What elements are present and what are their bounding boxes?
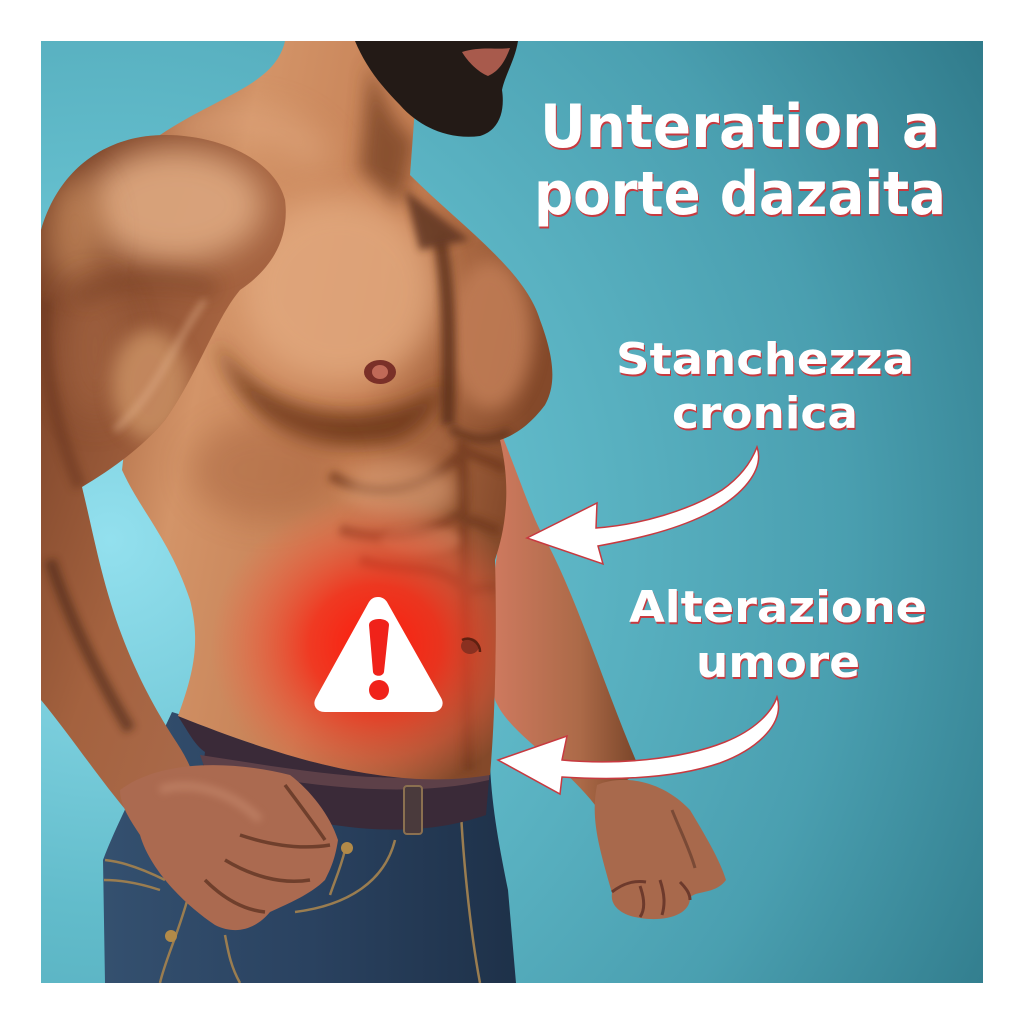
chest shading <box>240 195 440 385</box>
arrow: lower <box>498 697 778 794</box>
torso <box>122 41 552 795</box>
label: mood alteration <box>629 582 927 688</box>
head and beard <box>355 41 518 137</box>
label: chronic fatigue <box>616 334 914 439</box>
icon: warning triangle <box>315 598 442 711</box>
arrow: upper <box>527 447 759 564</box>
neck and trapezius shading <box>360 60 415 210</box>
jeans <box>103 712 516 983</box>
title: porte dazaita <box>534 159 946 229</box>
abdominal muscle lines <box>330 440 505 770</box>
title <box>534 92 946 229</box>
left hand <box>120 765 338 930</box>
right arm and hand <box>489 430 726 919</box>
label: chronic fatigue: cronica <box>672 388 858 439</box>
label: chronic fatigue: Stanchezza <box>616 334 914 385</box>
illustration: man with abdominal pain <box>41 41 726 983</box>
label: mood alteration: Alterazione <box>629 582 927 633</box>
title: Unteration a <box>540 92 940 162</box>
upper arm and forearm <box>41 135 286 815</box>
red inflamed area <box>229 511 496 779</box>
label: mood alteration: umore <box>696 637 860 688</box>
